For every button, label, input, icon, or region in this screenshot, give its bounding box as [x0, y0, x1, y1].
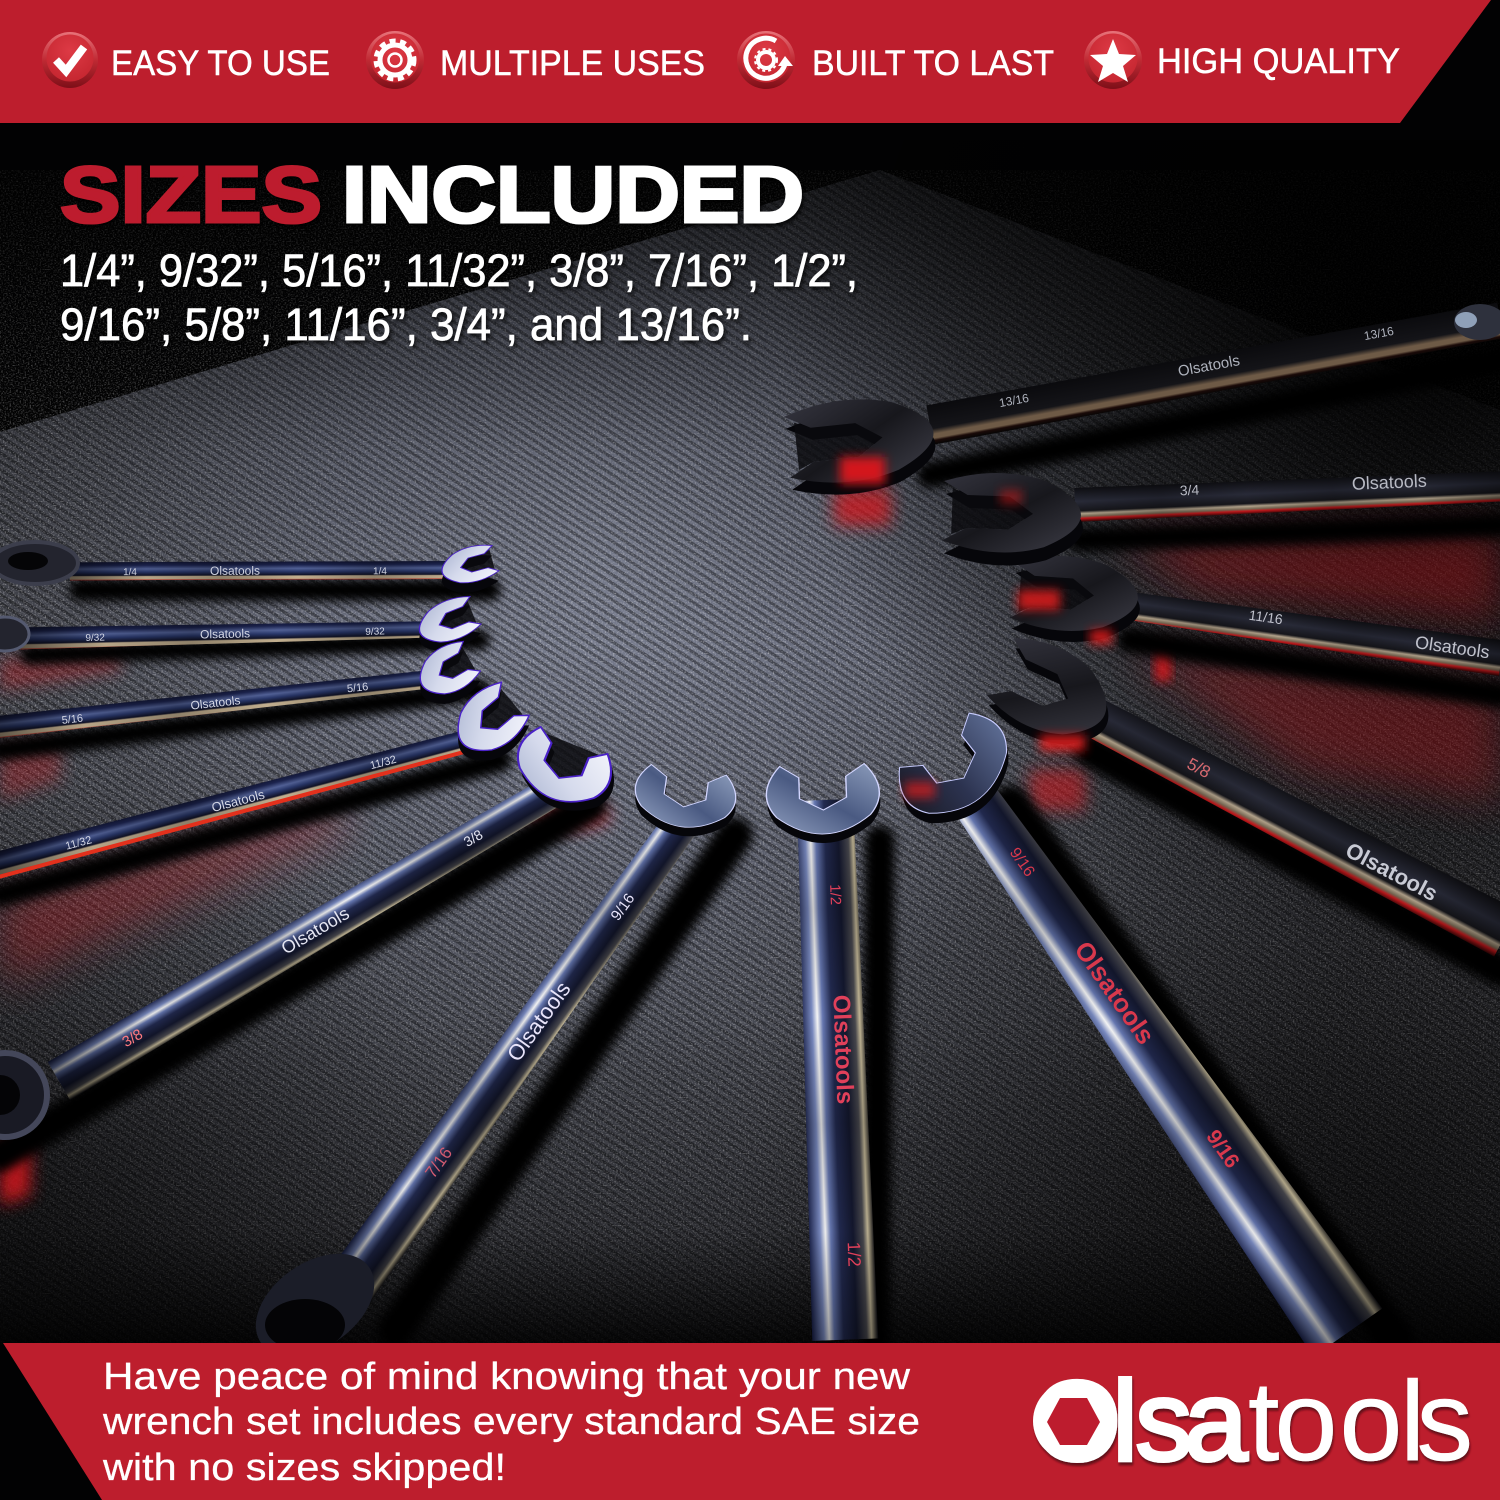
wrench 5/16: Olsatools: [190, 693, 241, 713]
heading: sizes included: [60, 150, 804, 239]
size list: [60, 245, 858, 350]
wrench 9/32: 9/32: [365, 626, 385, 638]
wrench 1/2: [765, 763, 882, 1341]
wrench 1/2: 1/2: [826, 884, 844, 905]
wrench 13/16: 13/16: [1363, 324, 1395, 343]
label: easy to use: EASY TO USE: [111, 44, 330, 83]
red light reflections: [0, 490, 1500, 1205]
wrench 1/4: [0, 541, 500, 599]
wrench 9/16: Olsatools: [1069, 936, 1161, 1050]
wrench 7/16: 7/16: [421, 1144, 456, 1182]
wrench 5/16: 5/16: [346, 681, 369, 695]
bottom banner: [3, 1343, 1500, 1500]
label: built to last: BUILT TO LAST: [812, 44, 1054, 83]
wrench 3/4: Olsatools: [1351, 471, 1427, 494]
wrench 9/16: 9/16: [1201, 1126, 1244, 1173]
wrench 3/4: [942, 467, 1500, 568]
icon: gear badge: [366, 31, 424, 89]
wrench 3/8: Olsatools: [278, 903, 353, 958]
red glints on dark wrench jaws: [905, 490, 1112, 798]
wrench 1/4: 1/4: [123, 567, 137, 578]
wrench 11/32: [0, 677, 534, 877]
wrench 7/16: [237, 763, 739, 1377]
wrench 11/32: Olsatools: [210, 786, 267, 815]
wrench 13/16: 13/16: [998, 391, 1030, 410]
wrench 7/16: Olsatools: [502, 977, 576, 1066]
icon: check mark badge: [42, 32, 98, 88]
wrench 11/16: 11/16: [1248, 607, 1284, 627]
wrench 9/32: Olsatools: [200, 626, 250, 641]
wrench 1/4: 1/4: [373, 566, 387, 577]
wrench 3/8: 3/8: [119, 1026, 146, 1051]
wrench 11/16: Olsatools: [1414, 632, 1491, 662]
wrench 9/32: [0, 592, 483, 660]
icon: star badge: [1084, 31, 1142, 89]
wrench 5/8: Olsatools: [1342, 837, 1442, 906]
wrench 5/8: 5/8: [1184, 754, 1214, 782]
wrench 5/8: [982, 629, 1500, 956]
top banner: [0, 0, 1491, 123]
wrench 7/16: 9/16: [608, 890, 638, 924]
size list: 9/16”, 5/8”, 11/16”, 3/4”, and 13/16”.: [60, 299, 752, 350]
wrench 13/16: Olsatools: [1177, 352, 1241, 380]
heading: sizes included: SIZES: [60, 150, 322, 239]
wrench 11/16: [1009, 553, 1500, 676]
wrench 5/16: 5/16: [61, 713, 84, 727]
label: multiple uses: MULTIPLE USES: [440, 44, 705, 83]
heading: sizes included: INCLUDED: [342, 150, 804, 239]
benefit: high quality: [1084, 31, 1400, 89]
logo: Olsatools: Olsatools: [1033, 1358, 1473, 1484]
wrench 1/2: Olsatools: [827, 994, 858, 1105]
wrench 9/16: 9/16: [1006, 845, 1038, 880]
wrench 9/32: 9/32: [85, 633, 105, 644]
reassurance text: wrench set includes every standard SAE size: [102, 1401, 920, 1443]
wrench 9/16: [888, 704, 1382, 1357]
wrench 1/4: Olsatools: [210, 564, 260, 578]
reassurance text: Have peace of mind knowing that your new: [103, 1356, 911, 1398]
wrench 3/4: 3/4: [1179, 482, 1200, 498]
benefit: easy to use: [42, 32, 330, 88]
reassurance text: with no sizes skipped!: [102, 1447, 506, 1489]
wrench 11/32: 11/32: [64, 834, 93, 853]
wrench 5/16: [0, 636, 483, 738]
icon: gear with cycle arrow badge: [737, 31, 795, 89]
banner background: [3, 1343, 1500, 1500]
benefit: built to last: [737, 31, 1054, 89]
wrench 3/8: [0, 722, 622, 1137]
banner background: [0, 0, 1491, 123]
wrench 3/8: 3/8: [461, 826, 486, 850]
benefit: multiple uses: [366, 31, 705, 89]
size list: 1/4”, 9/32”, 5/16”, 11/32”, 3/8”, 7/16”, 1/2”,: [60, 245, 858, 296]
reassurance text: [102, 1356, 920, 1489]
wrench 11/32: 11/32: [369, 754, 398, 772]
label: high quality: HIGH QUALITY: [1157, 42, 1400, 81]
wrench 1/2: 1/2: [844, 1241, 865, 1267]
wrench cast shadows: [0, 360, 1500, 1340]
wrench 13/16: [783, 301, 1500, 500]
